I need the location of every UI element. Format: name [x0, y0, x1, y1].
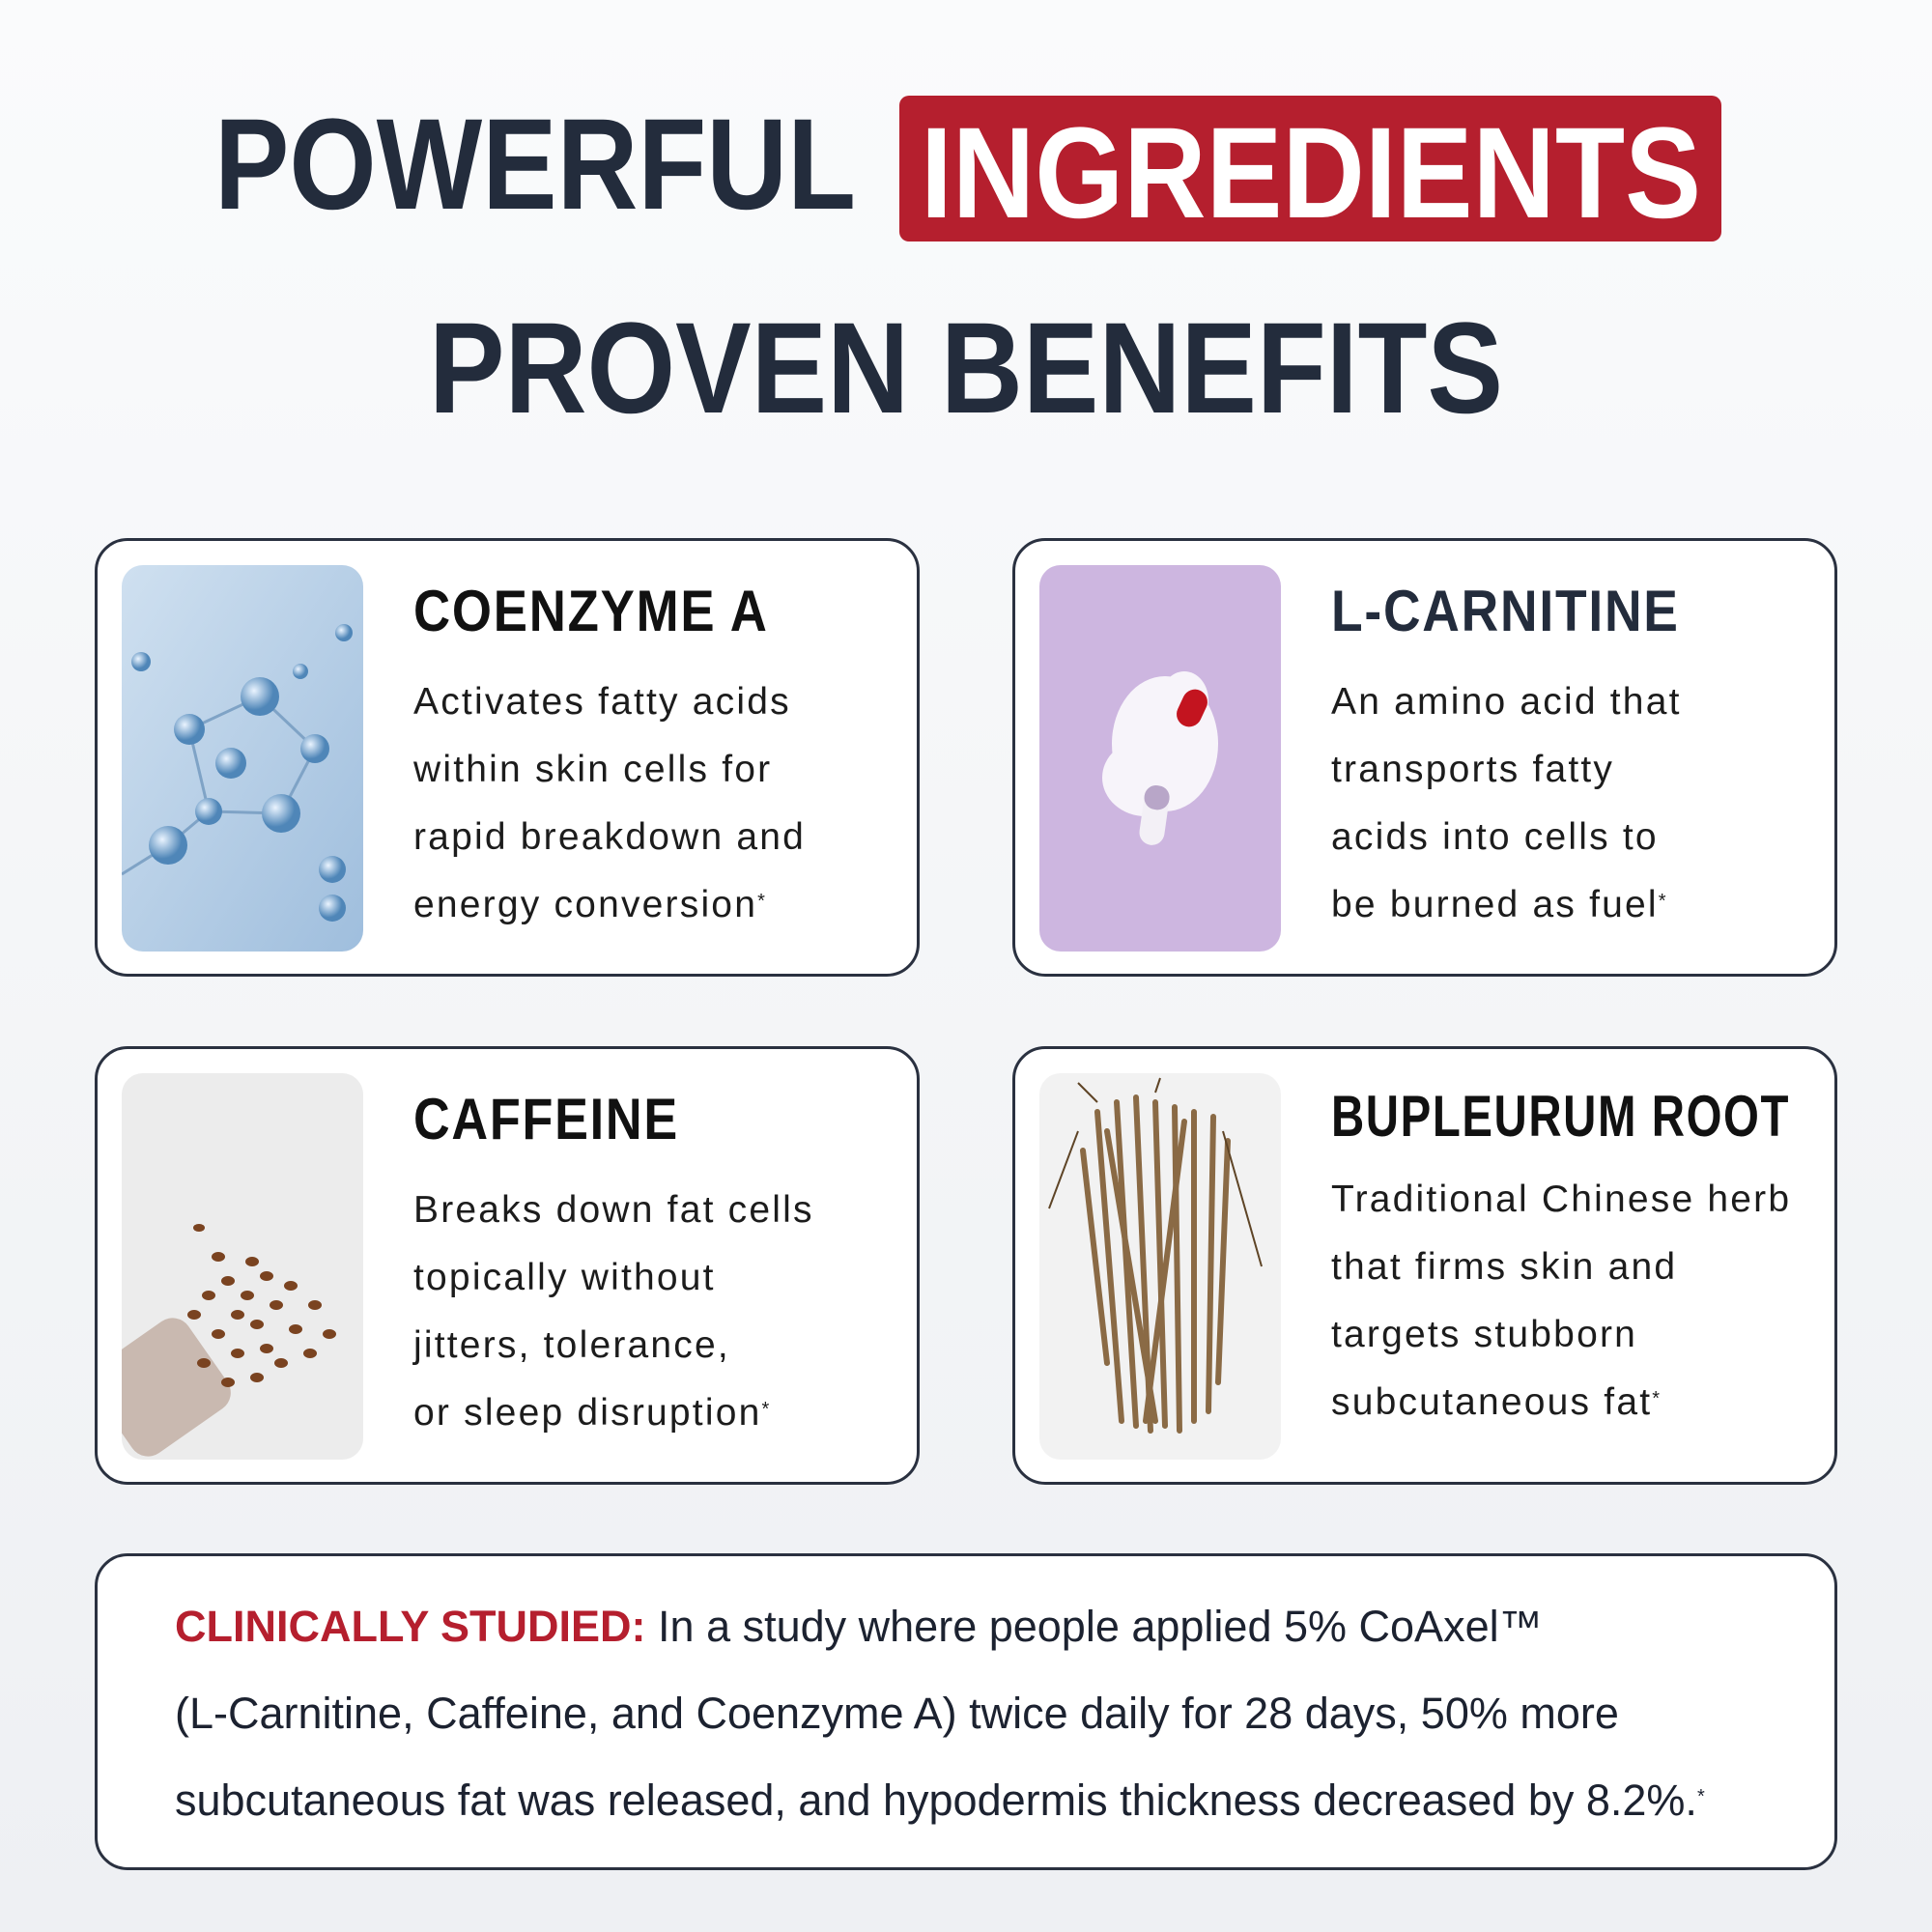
text: transports fatty	[1331, 749, 1614, 790]
title: red highlight box: INGREDIENTS	[921, 101, 1701, 245]
image: roots	[1039, 1073, 1281, 1460]
title	[214, 93, 1721, 440]
text: rapid breakdown and	[413, 816, 806, 858]
text: Traditional Chinese herb	[1331, 1179, 1791, 1220]
text: or sleep disruption*	[413, 1392, 771, 1434]
panel: bupleurum root	[1012, 1046, 1837, 1485]
image: capsules	[1039, 565, 1281, 952]
text: Breaks down fat cells	[413, 1189, 814, 1231]
text	[413, 681, 806, 925]
text: study: CLINICALLY STUDIED: In a study where people applied 5% CoAxel™	[175, 1602, 1543, 1651]
text: study: subcutaneous fat was released, and hypodermis thickness decreased by 8.2%.*	[175, 1776, 1705, 1825]
text: energy conversion*	[413, 884, 767, 925]
text: targets stubborn	[1331, 1314, 1637, 1355]
text: topically without	[413, 1257, 716, 1298]
text: jitters, tolerance,	[413, 1324, 730, 1366]
text: that firms skin and	[1331, 1246, 1677, 1288]
text	[1331, 681, 1682, 925]
text	[412, 1189, 814, 1434]
panel: clinically studied	[95, 1553, 1837, 1870]
text: acids into cells to	[1331, 816, 1659, 858]
text: Activates fatty acids	[413, 681, 791, 723]
text: subcutaneous fat*	[1331, 1381, 1662, 1423]
text: study	[175, 1602, 1705, 1825]
text: An amino acid that	[1331, 681, 1682, 723]
heading: BUPLEURUM ROOT	[1331, 1084, 1790, 1149]
title: PROVEN BENEFITS: PROVEN BENEFITS	[429, 297, 1503, 440]
panel: caffeine	[95, 1046, 920, 1485]
text	[1331, 1179, 1791, 1423]
image: molecules	[122, 565, 363, 952]
title: POWERFUL: POWERFUL	[214, 93, 856, 237]
heading: L-CARNITINE	[1331, 579, 1680, 643]
text: be burned as fuel*	[1331, 884, 1668, 925]
image: coffee beans	[122, 1073, 363, 1460]
panel: coenzyme A	[95, 538, 920, 977]
heading: COENZYME A	[413, 579, 769, 643]
text: study: (L-Carnitine, Caffeine, and Coenzyme A) twice daily for 28 days, 50% more	[175, 1689, 1619, 1738]
text: within skin cells for	[413, 749, 772, 790]
panel: L-carnitine	[1012, 538, 1837, 977]
heading: CAFFEINE	[413, 1087, 679, 1151]
